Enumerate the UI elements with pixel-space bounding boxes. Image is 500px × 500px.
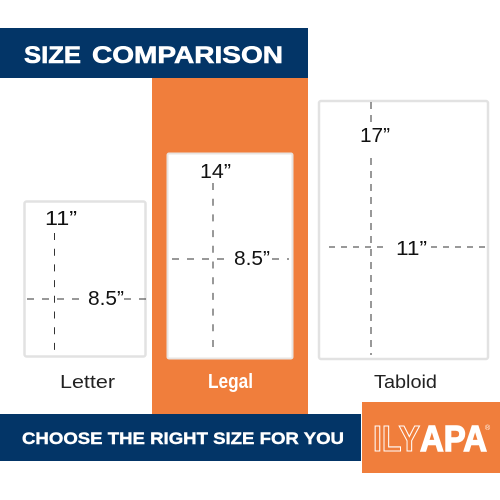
title: COMPARISON <box>92 42 283 69</box>
logo solid part: APA <box>420 418 487 459</box>
legal sheet frame <box>168 154 292 358</box>
legal width label: 8.5” <box>234 248 270 270</box>
panel: legal size <box>168 154 292 393</box>
registered mark: ® <box>485 424 491 432</box>
legal height label: 14” <box>200 161 231 183</box>
legal height dashed line <box>212 183 214 349</box>
letter height dashed line <box>54 233 56 351</box>
letter sheet frame <box>24 202 146 356</box>
letter width label: 8.5” <box>88 288 124 310</box>
tabloid height label: 17” <box>360 125 390 147</box>
tabloid height dashed line <box>370 102 372 355</box>
footer text: CHOOSE THE RIGHT SIZE FOR YOU <box>22 429 344 448</box>
legal name: Legal <box>208 371 253 393</box>
letter width dashed line <box>27 298 147 300</box>
letter height label: 11” <box>45 208 77 230</box>
header banner <box>0 28 308 78</box>
tabloid sheet frame <box>319 101 488 359</box>
tabloid width label: 11” <box>396 238 427 260</box>
panel: letter size <box>24 202 147 392</box>
tabloid width dashed line <box>329 246 486 248</box>
tabloid name: Tabloid <box>374 371 437 392</box>
panel: tabloid size <box>319 101 488 392</box>
logo outline part: ILY <box>373 418 420 459</box>
letter name: Letter <box>60 371 115 392</box>
logo panel <box>362 402 500 473</box>
panel: legal orange column <box>152 78 308 414</box>
title: SIZE <box>24 42 81 69</box>
legal width dashed line <box>172 258 289 260</box>
footer banner <box>0 414 361 461</box>
